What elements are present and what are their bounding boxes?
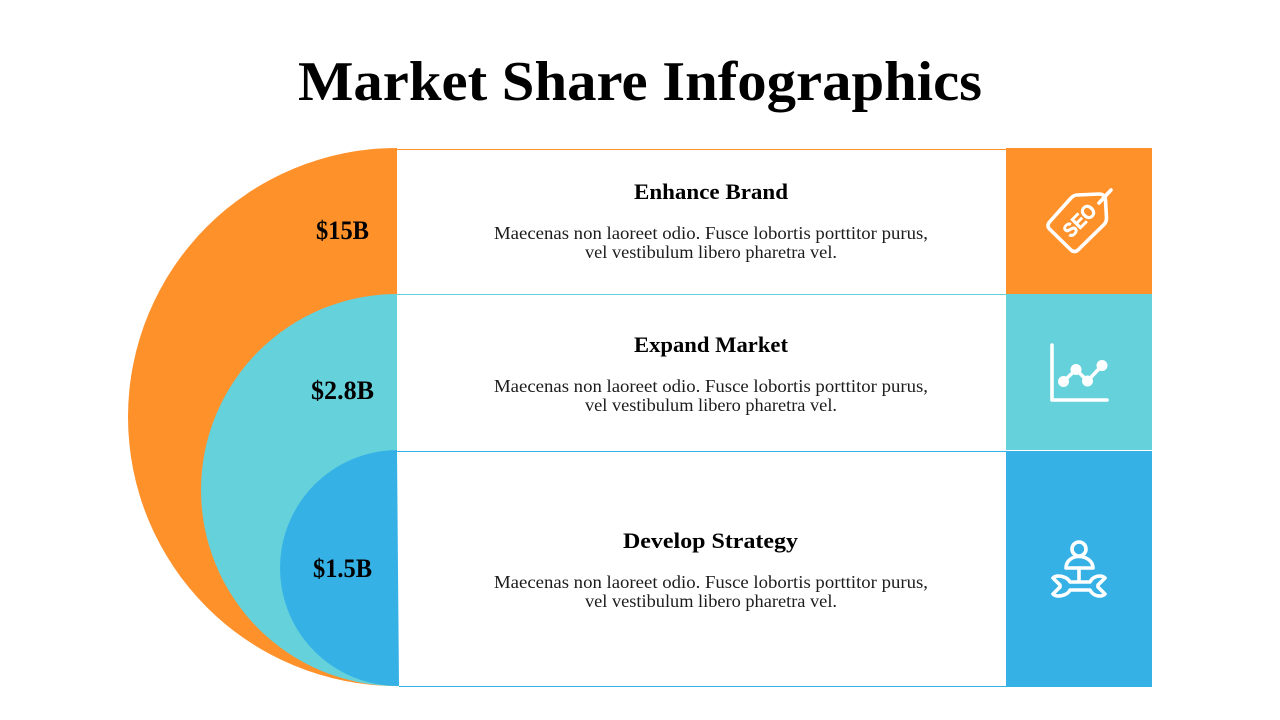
heading: Expand Market: Expand Market: [634, 332, 789, 357]
panel: nested semicircles: [128, 148, 399, 686]
row: Enhance Brand: [397, 148, 1152, 294]
semicircle: teal $2.8B: [201, 294, 397, 686]
semicircle: orange $15B: [128, 148, 397, 686]
row bottom rule: [399, 686, 1006, 687]
text block: Expand Market description: Maecenas non laoreet odio. Fusce lobortis porttitor purus,: [494, 376, 928, 396]
row top rule: [397, 149, 1006, 150]
row: Develop Strategy: [397, 451, 1152, 687]
semicircle: blue $1.5B: [280, 450, 399, 686]
icon: SEO tag: [1048, 190, 1111, 252]
icon panel: blue: [1006, 451, 1152, 687]
text block: Develop Strategy description: [494, 572, 928, 611]
icon: line chart: [1052, 345, 1108, 400]
icon: SEO tag: SEO: [1059, 200, 1101, 242]
row: Expand Market: [397, 294, 1152, 450]
icon: person with wrench: [1053, 542, 1105, 596]
icon panel: orange: [1006, 148, 1152, 294]
text block: Enhance Brand description: [494, 223, 928, 262]
text block: Enhance Brand description: vel vestibulum libero pharetra vel.: [585, 242, 837, 262]
text block: Develop Strategy description: vel vestibulum libero pharetra vel.: [585, 591, 837, 611]
value: $15B: $15B: [316, 216, 369, 245]
title: Market Share Infographics: [298, 51, 982, 113]
value: $1.5B: $1.5B: [313, 554, 372, 583]
text block: Expand Market description: vel vestibulum libero pharetra vel.: [585, 395, 837, 415]
text block: Expand Market description: [494, 376, 928, 415]
row top rule: [397, 294, 1006, 295]
text block: Enhance Brand description: Maecenas non laoreet odio. Fusce lobortis porttitor purus,: [494, 223, 928, 243]
text block: Develop Strategy description: Maecenas non laoreet odio. Fusce lobortis porttitor purus,: [494, 572, 928, 592]
value: $2.8B: $2.8B: [311, 376, 374, 405]
icon panel: teal: [1006, 294, 1152, 450]
row top rule: [397, 451, 1006, 452]
heading: Develop Strategy: Develop Strategy: [623, 528, 799, 553]
heading: Enhance Brand: Enhance Brand: [634, 179, 788, 204]
